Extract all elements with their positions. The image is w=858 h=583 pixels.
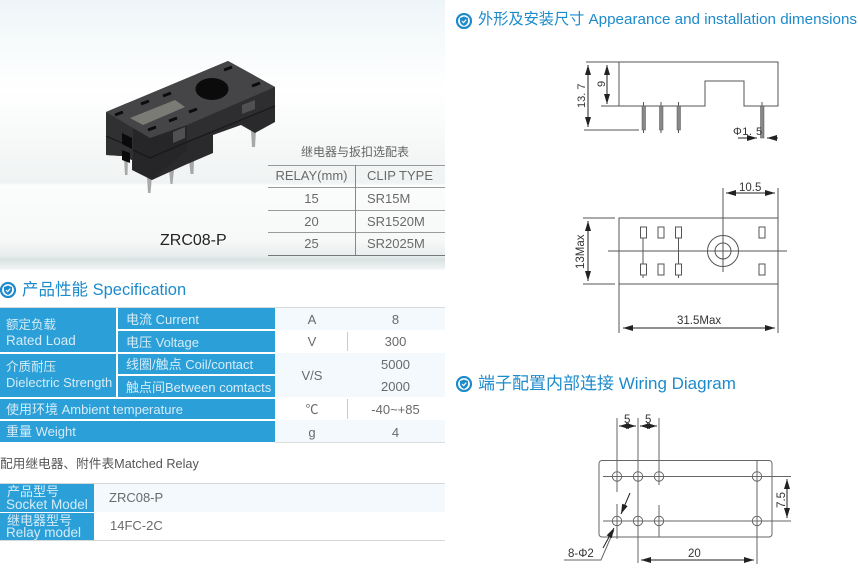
label: model name: ZRC08-P: [160, 232, 227, 249]
heading: Appearance and installation dimensions: 外形及安装尺寸 Appearance and installation dimensions: [478, 11, 857, 28]
table: specification: 线圈/触点 Coil/contact: [126, 357, 253, 372]
table: relay and clip types: RELAY(mm): [276, 168, 347, 183]
table: matched relay: [0, 483, 445, 541]
table: specification: 电压 Voltage: [126, 335, 199, 350]
table: relay and clip types: 15: [304, 191, 319, 206]
table: matched relay: Socket Model: [6, 497, 88, 512]
table: matched relay: ZRC08-P: [109, 490, 163, 505]
table: specification: Rated Load: [6, 333, 76, 348]
heading: Wiring Diagram: 端子配置内部连接 Wiring Diagram: [478, 374, 736, 393]
heading: clip table title: 继电器与扳扣选配表: [301, 145, 409, 159]
table: specification: -40~+85: [371, 402, 420, 417]
chart: wiring diagram: 7.5: [776, 492, 788, 508]
table: relay and clip types: 20: [304, 214, 319, 229]
table: specification: V: [308, 334, 316, 349]
chart: top view dimensions: 13Max: [575, 234, 587, 269]
table: matched relay: 继电器型号: [7, 513, 72, 528]
table: specification: 300: [385, 334, 406, 349]
table: specification: 4: [392, 425, 399, 440]
chart: top view dimensions: 31.5Max: [677, 315, 721, 327]
table: relay and clip types: 25: [304, 236, 319, 251]
table: relay and clip types: [268, 165, 445, 256]
chart: top view dimensions: [575, 182, 787, 333]
text: matched relay heading: 配用继电器、附件表Matched Relay: [0, 457, 199, 471]
icon: shield badge: [0, 282, 16, 298]
table: specification: 重量 Weight: [6, 424, 76, 439]
icon: shield badge: [456, 13, 472, 29]
chart: side view dimensions: 9: [596, 81, 608, 87]
table: specification: 8: [392, 312, 399, 327]
table: specification: [0, 307, 445, 443]
table: specification: 5000: [381, 357, 410, 372]
table: specification: Dielectric Strength: [6, 375, 112, 390]
table: relay and clip types: SR1520M: [367, 214, 425, 229]
table: relay and clip types: SR15M: [367, 191, 410, 206]
chart: wiring diagram: [564, 414, 791, 564]
table: specification: g: [308, 425, 316, 440]
table: specification: 电流 Current: [126, 312, 199, 327]
table: specification: 介质耐压: [6, 360, 56, 374]
chart: side view dimensions: Φ1. 5: [733, 126, 763, 138]
panel: product photo: [0, 0, 445, 270]
chart: wiring diagram: 5: [624, 414, 630, 426]
table: specification: A: [308, 312, 316, 327]
chart: wiring diagram: 8-Φ2: [568, 548, 594, 560]
table: specification: V/S: [302, 368, 322, 383]
chart: top view dimensions: 10.5: [739, 182, 761, 194]
table: specification: 2000: [381, 379, 410, 394]
table: matched relay: 14FC-2C: [110, 518, 163, 533]
icon: relay socket product: [106, 61, 276, 193]
heading: Specification: 产品性能 Specification: [22, 281, 186, 299]
chart: wiring diagram: 5: [645, 414, 651, 426]
table: specification: ℃: [305, 402, 318, 417]
chart: side view dimensions: [576, 62, 778, 141]
table: specification: 触点间Between comtacts: [126, 380, 271, 395]
table: relay and clip types: CLIP TYPE: [367, 168, 433, 183]
table: relay and clip types: SR2025M: [367, 236, 425, 251]
table: matched relay: Relay model: [6, 525, 81, 540]
table: matched relay: 产品型号: [7, 484, 59, 499]
icon: shield badge: [456, 376, 472, 392]
table: specification: 额定负载: [6, 318, 56, 332]
table: specification: 使用环境 Ambient temperature: [6, 402, 183, 417]
chart: side view dimensions: 13. 7: [576, 84, 588, 108]
chart: wiring diagram: 20: [688, 548, 701, 560]
